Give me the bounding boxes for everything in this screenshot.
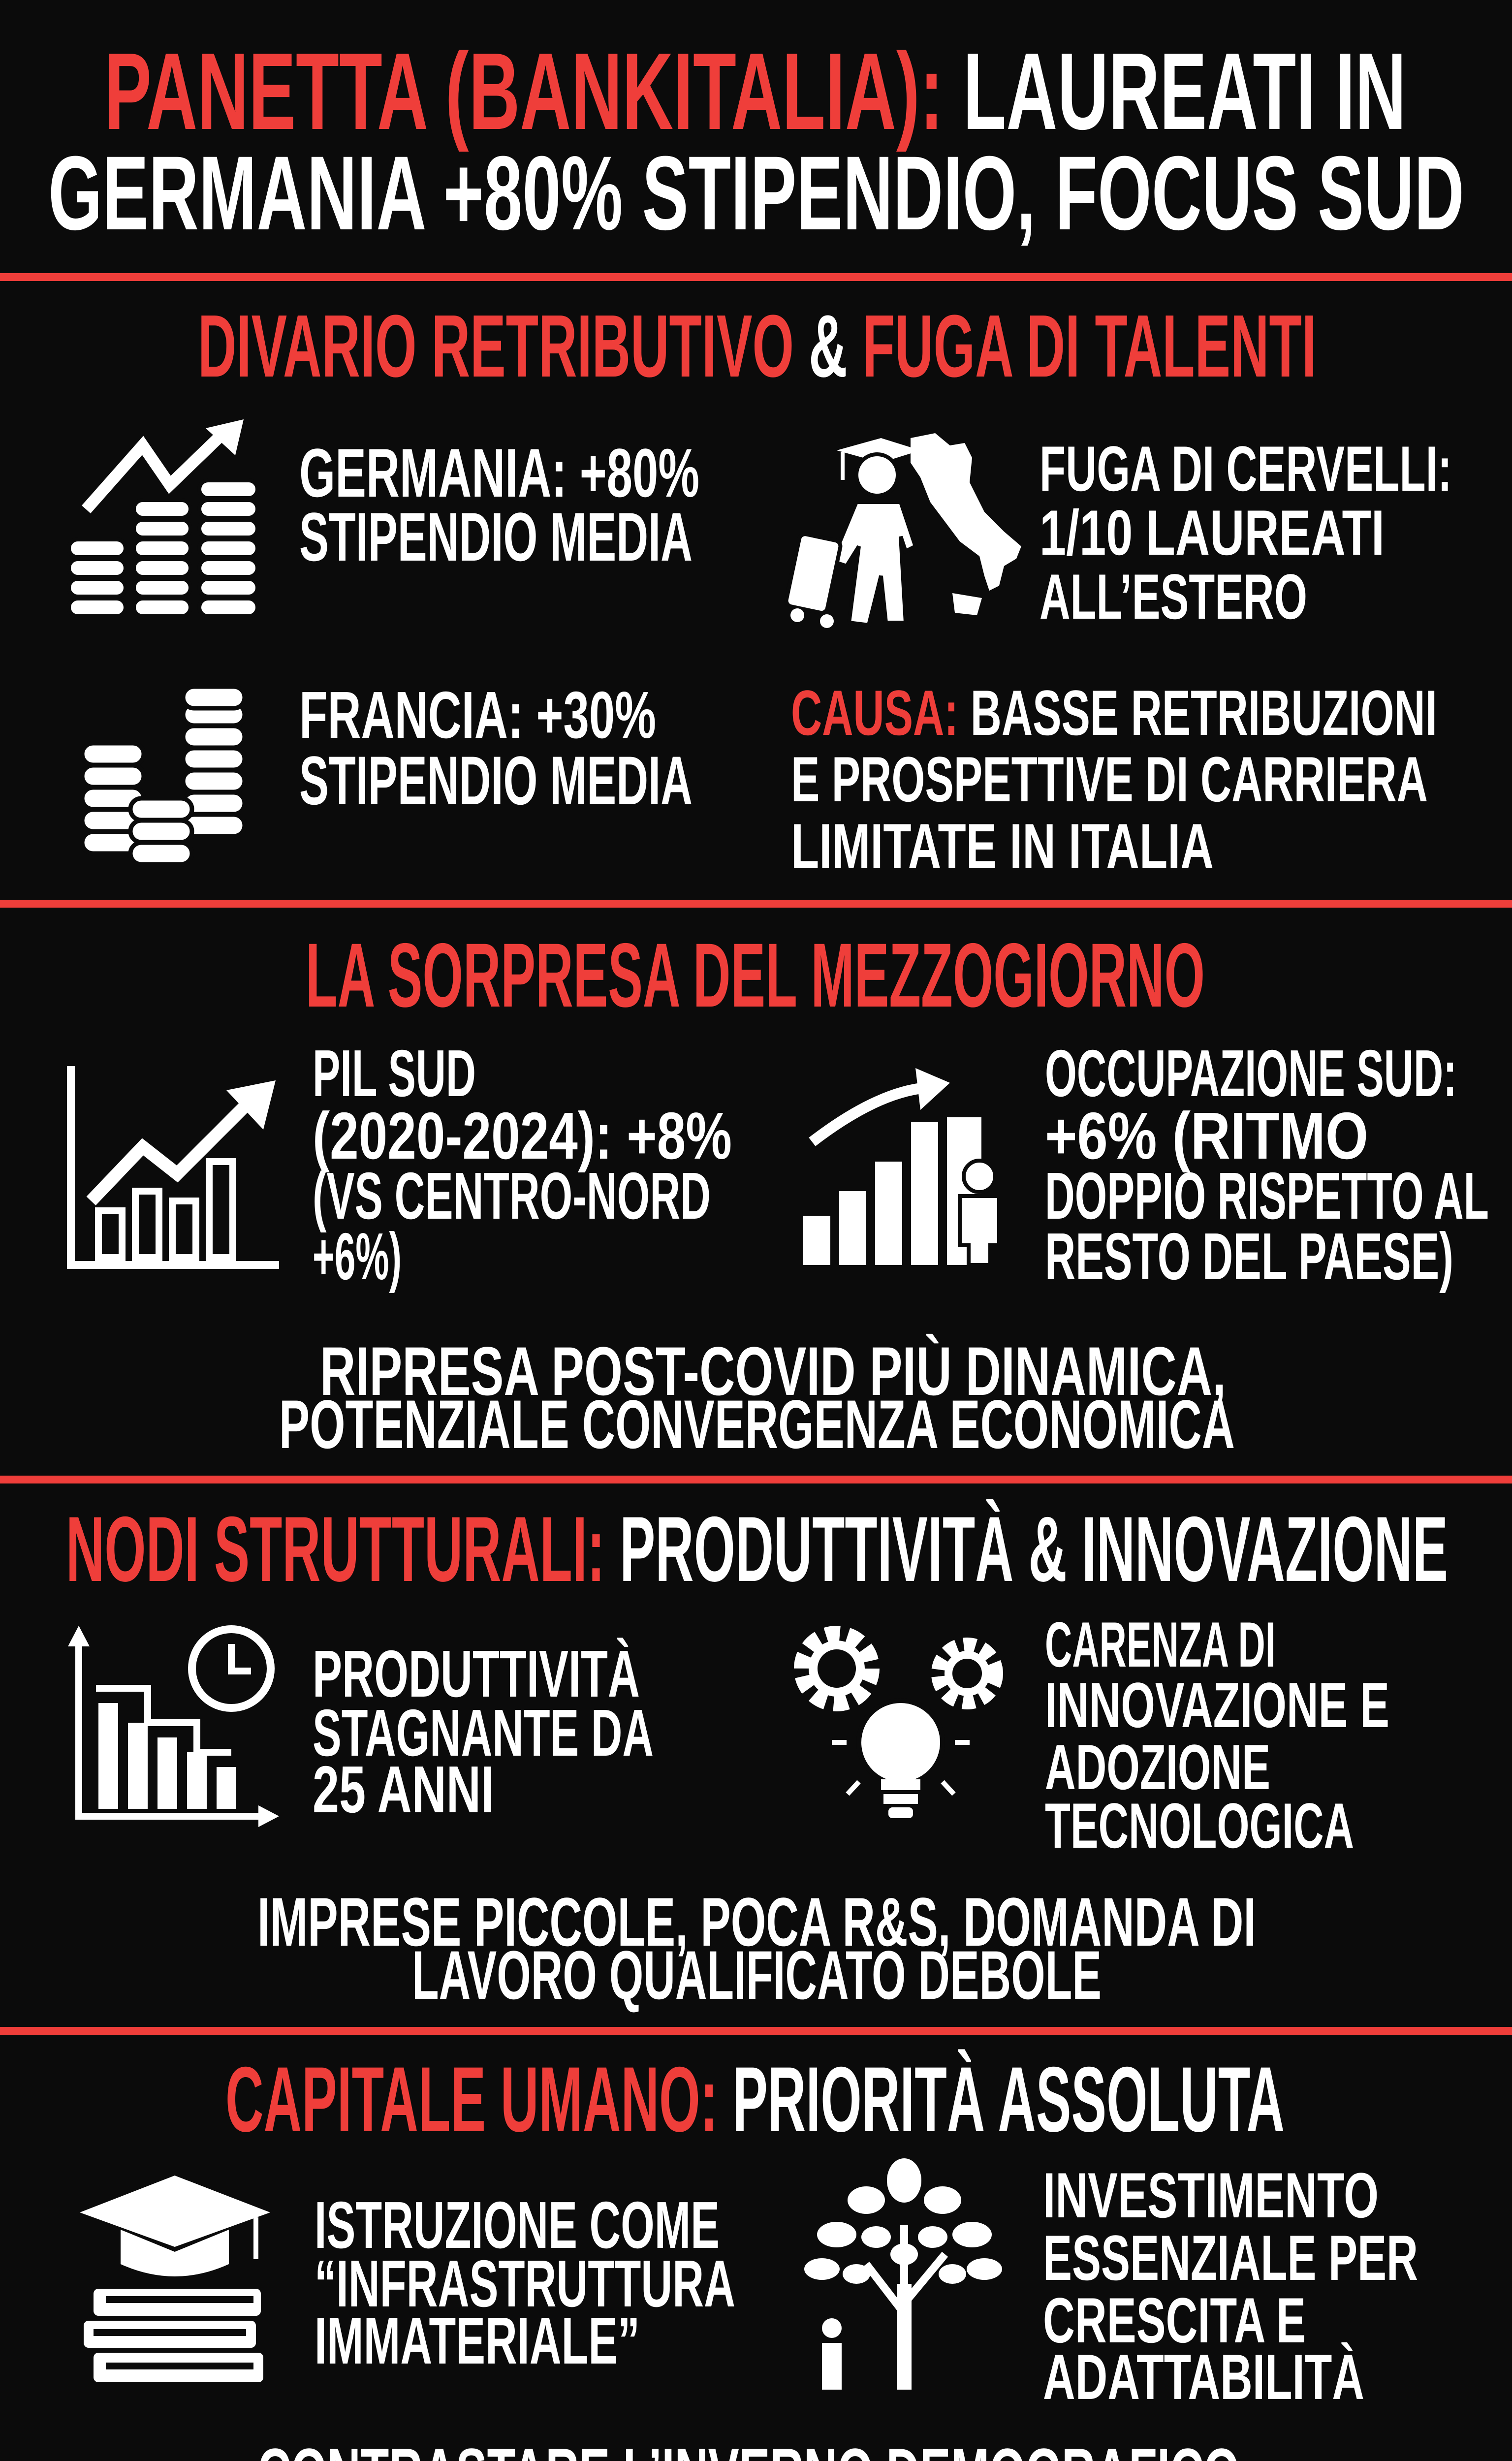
text: francia: FRANCIA: +30% [299,678,656,752]
title [48,31,1464,252]
text: produttivita [313,1637,654,1827]
text: germania: STIPENDIO MEDIA [299,498,693,575]
text: istruzione [315,2188,735,2378]
text: pil sud: +6%) [313,1219,402,1294]
icon: coins with rising arrow [69,419,257,616]
text: investimento: INVESTIMENTO [1043,2159,1379,2231]
text: imprese: LAVORO QUALIFICATO DEBOLE [412,1936,1102,2014]
text: investimento [1043,2159,1418,2413]
text: carenza: CARENZA DI [1045,1609,1276,1680]
text: fuga di cervelli: 1/10 LAUREATI [1040,497,1385,568]
text: istruzione: “INFRASTRUTTURA [315,2246,735,2321]
text: carenza: TECNOLOGICA [1045,1790,1354,1862]
text: francia [299,678,693,819]
text: causa: LIMITATE IN ITALIA [791,810,1214,882]
text: produttivita: STAGNANTE DA [313,1696,654,1770]
text: istruzione: ISTRUZIONE COME [315,2188,720,2262]
text: germania: GERMANIA: +80% [299,434,699,511]
text: occupazione sud: +6% (RITMO [1045,1099,1368,1173]
text: produttivita: PRODUTTIVITÀ [313,1637,640,1711]
text: investimento: ADATTABILITÀ [1043,2341,1364,2413]
text: investimento: CRESCITA E [1043,2284,1306,2356]
text: occupazione sud [1045,1036,1489,1294]
text: pil sud: PIL SUD [313,1036,476,1110]
panel: mezzogiorno [71,925,1489,1463]
text: fuga di cervelli [1040,433,1452,632]
icon: gears and light bulb [802,1634,996,1818]
text: pil sud: (2020-2024): +8% [313,1099,732,1173]
text: istruzione: IMMATERIALE” [315,2303,640,2378]
icon: employment bars with person [803,1068,999,1265]
text: ripresa [279,1332,1235,1463]
icon: stagnant productivity chart with clock [68,1626,279,1827]
text: pil sud: (VS CENTRO-NORD [313,1159,711,1233]
icon: tree with person [804,2158,1002,2390]
icon: coin stacks [82,687,245,864]
text: carenza: ADOZIONE [1045,1731,1270,1803]
icon: graduate leaving italy [785,433,1021,628]
text: produttivita: 25 ANNI [313,1752,494,1827]
text: carenza [1045,1609,1389,1862]
panel: capitale umano [80,2048,1418,2461]
panel: divario retributivo [69,297,1452,882]
panel: nodi strutturali [66,1497,1448,2014]
text: fuga di cervelli: ALL’ESTERO [1040,561,1307,632]
icon: growth chart [71,1066,279,1265]
text: imprese [257,1883,1256,2014]
text: pil sud [313,1036,732,1294]
icon: graduation cap on books [80,2176,270,2382]
text: germania [299,434,699,575]
text: francia: STIPENDIO MEDIA [299,742,693,819]
text: causa [791,677,1437,882]
